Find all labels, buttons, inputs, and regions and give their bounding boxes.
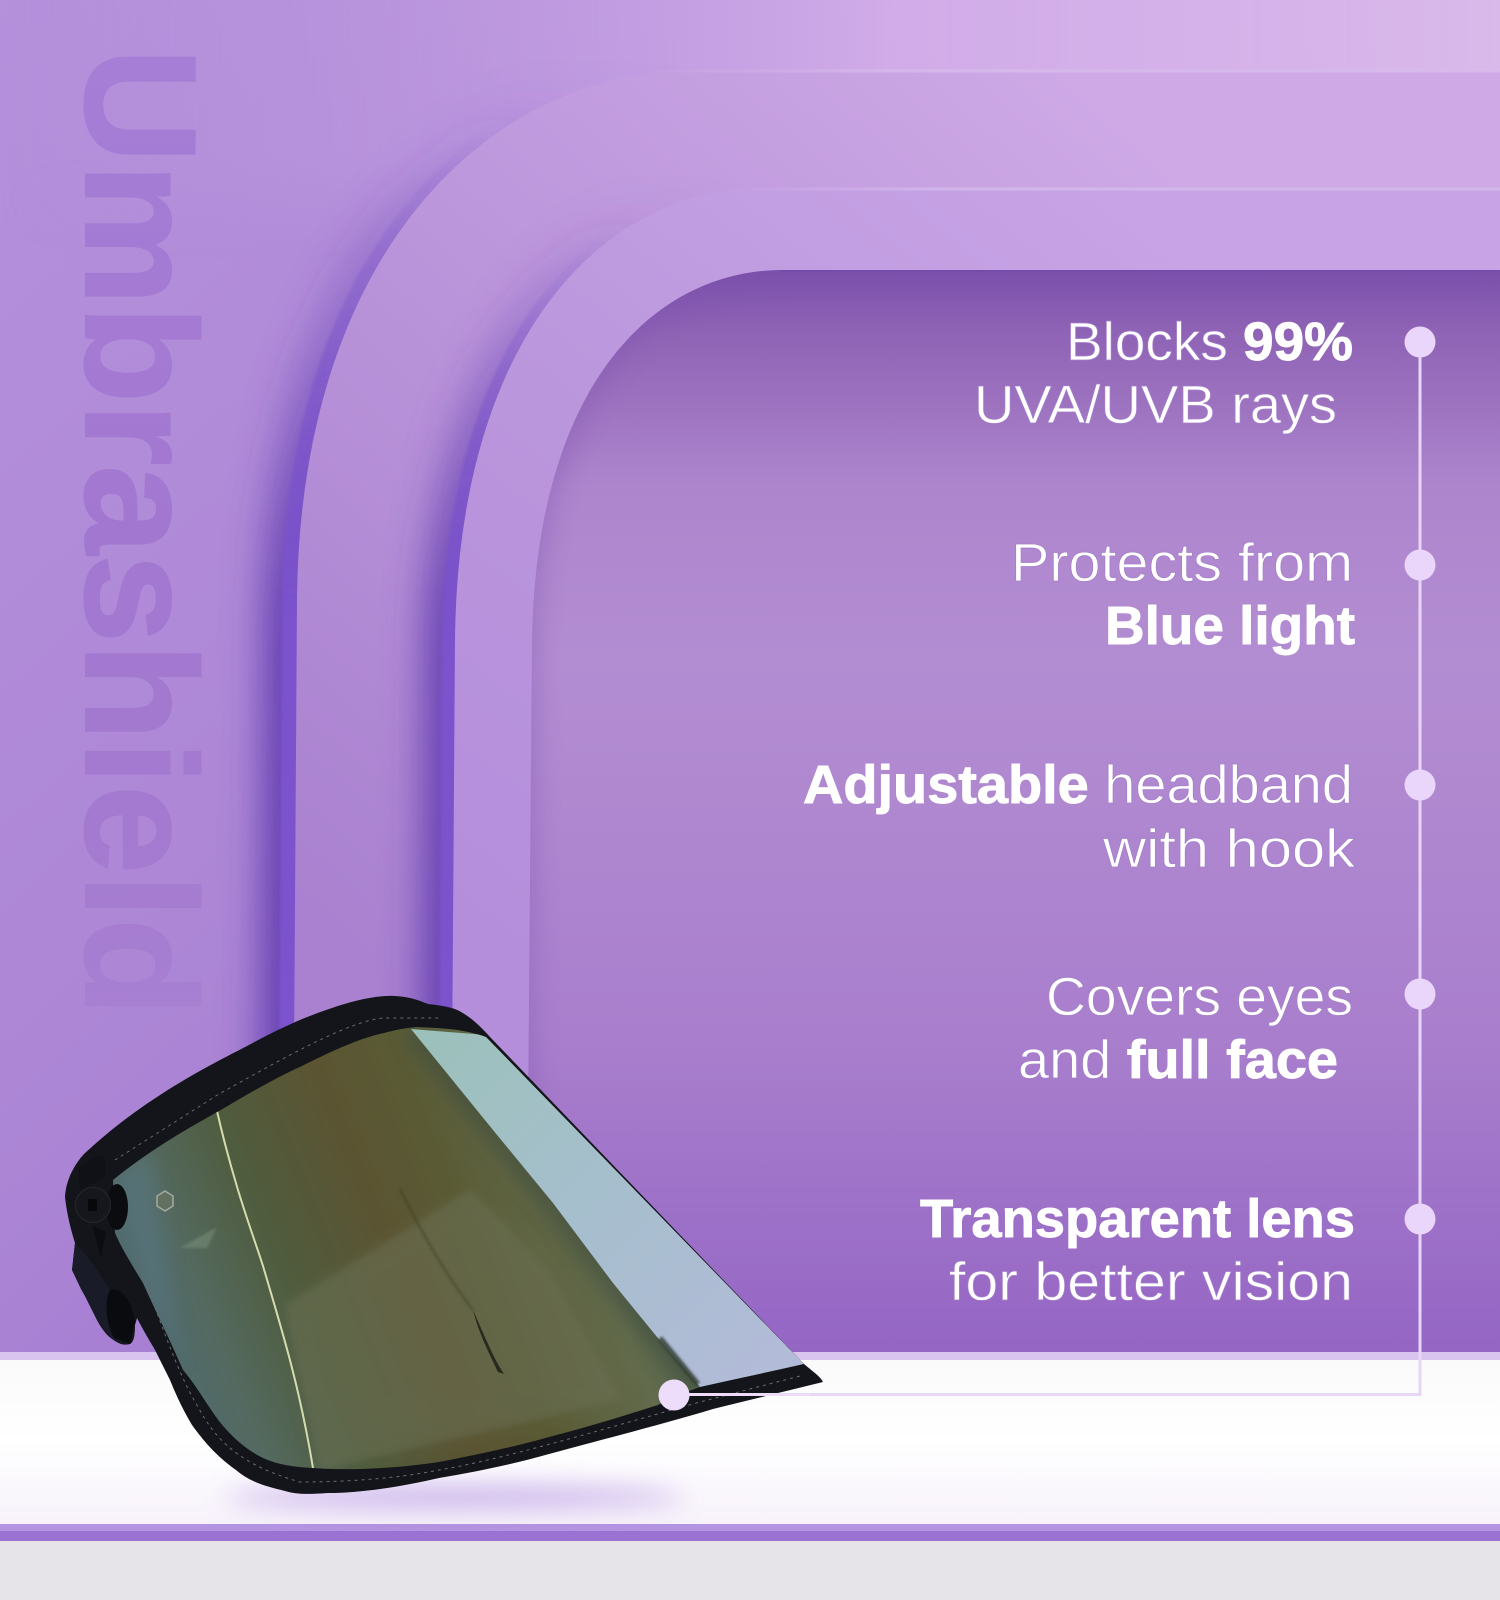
dot: blue light bbox=[1404, 550, 1436, 580]
product: visor bbox=[65, 996, 823, 1494]
panel: inner raised frame bbox=[445, 184, 1500, 1360]
visor hook and hinge knob bbox=[72, 1156, 135, 1344]
visor shadow on floor bbox=[225, 1487, 685, 1507]
panel: recessed window bbox=[520, 264, 1500, 1360]
dot: face coverage bbox=[1404, 978, 1436, 1010]
dot: lens bbox=[1404, 1204, 1436, 1234]
feature: adjustable headband: Adjustable headband bbox=[803, 755, 1353, 815]
callout dot and line on lens bbox=[658, 1380, 810, 1410]
feature: face coverage bbox=[1018, 967, 1353, 1090]
background wall bbox=[0, 0, 1500, 1082]
feature: blocks UV: Blocks 99% bbox=[1066, 312, 1353, 372]
feature: face coverage: Covers eyes bbox=[1046, 967, 1353, 1027]
feature: face coverage: and full face bbox=[1018, 1030, 1338, 1090]
floor platform bbox=[0, 1352, 1500, 1600]
visor logo bbox=[157, 1191, 173, 1211]
feature: blue light: Blue light bbox=[1105, 596, 1355, 656]
feature: blue light bbox=[1011, 533, 1355, 656]
feature: transparent lens: for better vision bbox=[949, 1252, 1353, 1312]
visor lens bbox=[100, 1020, 820, 1480]
dot: UV rays bbox=[1404, 326, 1436, 358]
panel: outer raised frame bbox=[287, 66, 1500, 1360]
feature: blocks UV: UVA/UVB rays bbox=[974, 375, 1337, 435]
feature: blocks UV bbox=[974, 312, 1353, 435]
feature: adjustable headband: with hook bbox=[1102, 819, 1356, 879]
feature: blue light: Protects from bbox=[1011, 533, 1353, 593]
connector line with feature dots bbox=[800, 326, 1436, 1394]
dot: headband bbox=[1404, 770, 1436, 800]
watermark: vertical brand name: Umbrashield bbox=[52, 48, 228, 1016]
feature: transparent lens bbox=[920, 1189, 1355, 1312]
visor stitching bbox=[115, 1018, 800, 1482]
feature: adjustable headband bbox=[803, 755, 1356, 879]
visor black frame bbox=[65, 996, 823, 1494]
feature: transparent lens: Transparent lens bbox=[920, 1189, 1355, 1249]
